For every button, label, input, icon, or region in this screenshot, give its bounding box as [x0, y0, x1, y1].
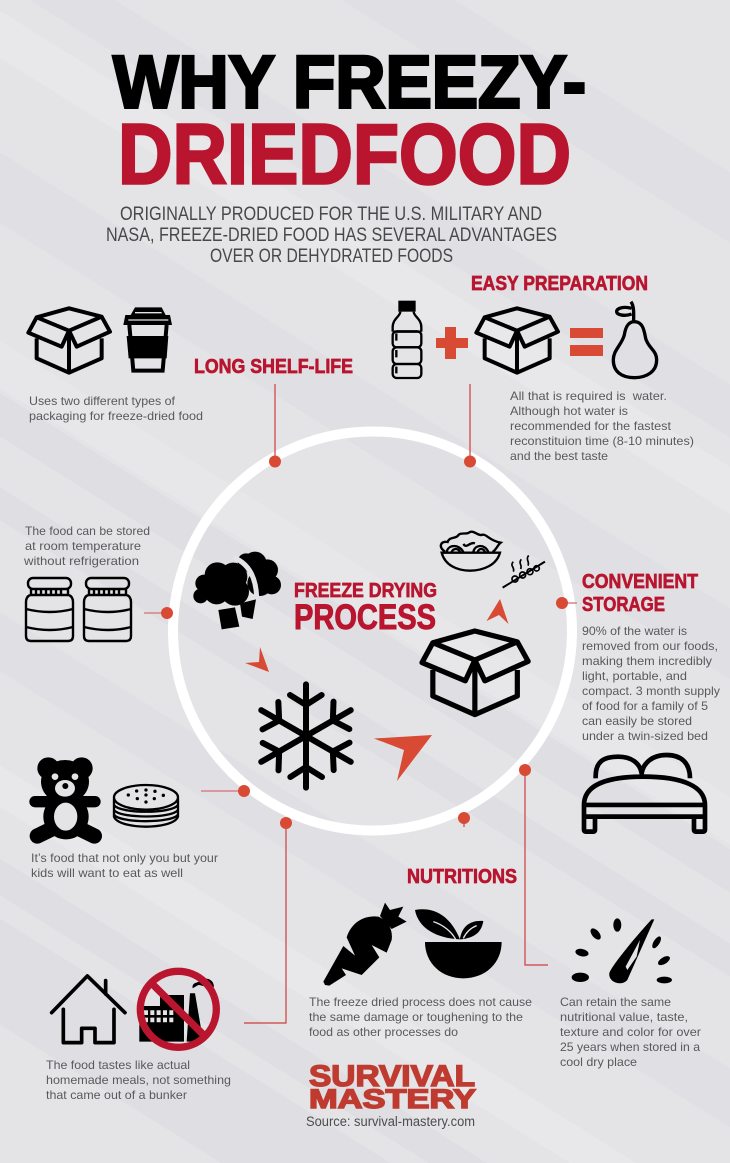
icon: broccoli [193, 552, 281, 629]
text: storage: compact. 3 month supply [582, 684, 720, 698]
text: storage: light, portable, and [582, 669, 687, 683]
process ring [173, 432, 572, 830]
heading: convenient storage [582, 571, 698, 616]
text: retention [560, 995, 701, 1069]
icon: plus [436, 327, 468, 359]
text: packaging: Uses two different types of [29, 394, 176, 408]
source: Source: survival-mastery.com [306, 1114, 475, 1129]
panel: convenient storage [582, 571, 720, 832]
text: room temperature [23, 524, 150, 568]
text: homemade: homemade meals, not something [46, 1073, 231, 1087]
icon: pear [613, 302, 657, 378]
icon: crackers [114, 785, 178, 827]
logo: survival mastery: SURVIVAL [309, 1060, 475, 1093]
text: nutritions: food as other processes do [309, 1025, 458, 1039]
icon: skewer [503, 555, 545, 588]
icon: jar [26, 578, 73, 641]
icon: equals [570, 328, 603, 356]
heading: nutritions: NUTRITIONS [407, 866, 517, 888]
text: room temperature: without refrigeration [23, 554, 139, 568]
subtitle [106, 204, 557, 267]
panel: room temperature [23, 524, 150, 641]
text: retention: texture and color for over [560, 1025, 701, 1039]
title [113, 40, 586, 202]
heading: easy preparation: EASY PREPARATION [471, 273, 648, 295]
icon: snowflake [253, 684, 359, 788]
text: packaging [29, 394, 203, 423]
title: WHY FREEZY- [113, 40, 586, 124]
icon: house [52, 976, 125, 1043]
text: room temperature: at room temperature [25, 539, 141, 553]
subtitle: ORIGINALLY PRODUCED FOR THE U.S. MILITARY AND [120, 204, 542, 225]
text: preparation: Although hot water is [510, 404, 628, 418]
arrow [486, 599, 508, 624]
icon: carrot [323, 903, 407, 986]
logo: survival mastery: MASTERY [309, 1084, 476, 1114]
heading: convenient storage: CONVENIENT [582, 571, 698, 593]
text: storage [582, 624, 720, 743]
icon: box [28, 308, 110, 373]
text: kids: kids will want to eat as well [31, 866, 183, 880]
connector lines and dots [144, 384, 577, 1023]
panel: nutritions [309, 866, 532, 1039]
icon: box [422, 631, 528, 715]
text: preparation: reconstituion time (8-10 minutes) [510, 434, 694, 448]
text: homemade: that came out of a bunker [46, 1088, 187, 1102]
icon: no factory [139, 971, 216, 1047]
text: packaging: packaging for freeze-dried food [29, 409, 203, 423]
arrow [245, 647, 269, 672]
text: storage: 90% of the water is [582, 624, 687, 638]
title: DRIEDFOOD [118, 108, 571, 202]
text: retention: cool dry place [560, 1055, 637, 1069]
text: kids: It’s food that not only you but your [31, 851, 218, 865]
text: kids [31, 851, 218, 880]
text: nutritions: the same damage or toughening to the [309, 1010, 523, 1024]
heading: long shelf-life: LONG SHELF-LIFE [194, 356, 353, 378]
subtitle: NASA, FREEZE-DRIED FOOD HAS SEVERAL ADVANTAGES [106, 225, 557, 246]
panel: long shelf-life [28, 307, 353, 423]
text: room temperature: The food can be stored [25, 524, 150, 538]
text: preparation: recommended for the fastest [510, 419, 672, 433]
heading: freeze drying process: FREEZE DRYING [294, 580, 437, 602]
text: nutritions [309, 995, 532, 1039]
text: storage: making them incredibly [582, 654, 712, 668]
icon: jar [84, 578, 131, 641]
text: storage: can easily be stored [582, 714, 692, 728]
text: preparation [510, 389, 694, 463]
text: nutritions: The freeze dried process does not cause [309, 995, 532, 1009]
text: retention: nutritional value, taste, [560, 1010, 688, 1024]
icon: bed [584, 755, 705, 832]
icon: gauge [572, 918, 672, 983]
text: retention: 25 years when stored in a [560, 1040, 700, 1054]
icon: teddy bear [35, 757, 95, 839]
arrow [374, 735, 432, 781]
heading: freeze drying process [294, 580, 437, 637]
text: storage: of food for a family of 5 [582, 699, 708, 713]
subtitle: OVER OR DEHYDRATED FOODS [210, 246, 453, 267]
heading: freeze drying process: PROCESS [294, 598, 436, 637]
heading: convenient storage: STORAGE [582, 594, 665, 616]
text: storage: removed from our foods, [582, 639, 718, 653]
icon: coffee cup [123, 307, 172, 371]
text: preparation: and the best taste [510, 449, 608, 463]
text: storage: under a twin-sized bed [582, 729, 708, 743]
panel: shelf retention [560, 918, 701, 1069]
icon: water bottle [393, 301, 421, 378]
text: preparation: All that is required is water. [510, 389, 667, 403]
icon: leafy bowl [415, 909, 502, 978]
text: retention: Can retain the same [560, 995, 671, 1009]
text: homemade [46, 1058, 231, 1102]
logo: survival mastery [309, 1060, 476, 1114]
panel: easy preparation [393, 273, 694, 463]
panel: kids [31, 757, 218, 880]
text: homemade: The food tastes like actual [46, 1058, 190, 1072]
panel: homemade [46, 971, 231, 1102]
icon: box [476, 308, 558, 373]
icon: salad bowl [441, 532, 501, 571]
